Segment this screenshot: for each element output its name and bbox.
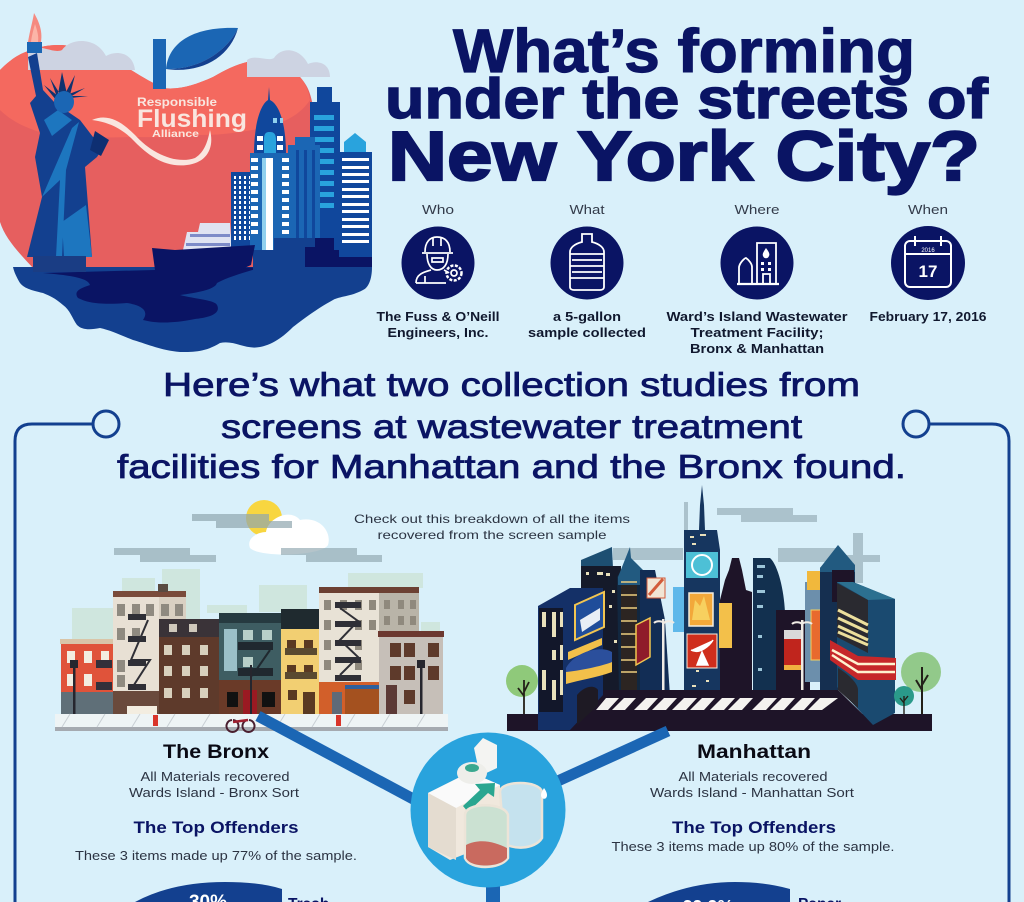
grey building <box>378 631 444 714</box>
Bronx note: These 3 items made up 77% of the sample. <box>75 849 357 863</box>
center dark tower <box>719 558 752 697</box>
tank building and toilet <box>428 738 500 860</box>
title <box>385 17 989 195</box>
when icon: calendar <box>891 226 965 300</box>
when column <box>870 203 986 324</box>
title: What’s forming <box>453 17 915 85</box>
clouds <box>28 41 330 77</box>
intro note: Check out this breakdown of all the items <box>354 512 630 526</box>
subheading: screens at wastewater treatment <box>221 408 802 445</box>
where label: Where <box>734 203 780 217</box>
Manhattan title: Manhattan <box>697 742 811 763</box>
Manhattan note: These 3 items made up 80% of the sample. <box>612 840 894 854</box>
right frame line with node <box>903 411 1009 902</box>
left block <box>538 588 612 730</box>
Manhattan subtitle: All Materials recovered <box>678 769 828 784</box>
left towers <box>581 547 685 697</box>
where text: Treatment Facility; <box>690 325 824 340</box>
where column <box>666 203 848 356</box>
when icon: calendar: 17 <box>919 262 937 281</box>
what text: sample collected <box>528 325 646 340</box>
Bronx illustration <box>55 500 448 732</box>
white tall building <box>113 584 186 714</box>
red building <box>60 639 114 714</box>
robe <box>27 53 108 257</box>
street base <box>507 690 932 731</box>
where icon: treatment facility <box>720 226 794 300</box>
brown building <box>159 619 219 714</box>
logo text: Flushing <box>137 105 247 133</box>
sky: sun and clouds <box>114 500 382 562</box>
when text: February 17, 2016 <box>870 309 986 324</box>
who text: Engineers, Inc. <box>388 325 488 340</box>
when label: When <box>908 203 948 217</box>
intro note: recovered from the screen sample <box>378 528 607 542</box>
what column <box>528 203 646 340</box>
who text <box>376 309 500 340</box>
crown <box>44 72 88 100</box>
apple <box>0 45 316 270</box>
treatment circle <box>410 732 566 888</box>
what text <box>528 309 646 340</box>
sky haze <box>613 502 880 583</box>
head <box>54 91 74 113</box>
street lamps <box>70 660 425 727</box>
what icon: water jug <box>550 226 624 300</box>
distant buildings <box>72 569 440 640</box>
ferry <box>152 223 255 270</box>
clarifier tanks <box>465 783 547 867</box>
Bronx heading <box>75 742 357 863</box>
logo text <box>92 97 247 165</box>
subheading: facilities for Manhattan and the Bronx found. <box>117 448 906 485</box>
Manhattan top offenders heading: The Top Offenders <box>672 819 836 837</box>
hero illustration: apple, statue and skyline <box>0 13 372 352</box>
Manhattan subtitle: Wards Island - Manhattan Sort <box>650 785 854 800</box>
sidewalk <box>55 714 448 731</box>
cream building <box>319 587 419 714</box>
Manhattan illustration <box>506 485 941 731</box>
pedestal <box>33 256 86 272</box>
logo text: Alliance <box>152 129 200 140</box>
who icon: engineer <box>402 226 474 300</box>
torch <box>27 13 42 53</box>
Bronx subtitle <box>129 769 299 800</box>
what label: What <box>570 203 605 217</box>
statue of liberty <box>27 13 109 272</box>
title: New York City? <box>388 117 980 195</box>
title: under the streets of <box>385 67 989 131</box>
where text <box>666 309 848 356</box>
teal building <box>219 613 281 714</box>
Manhattan chart start <box>648 882 841 902</box>
tall tower <box>684 485 720 697</box>
trees <box>506 652 941 714</box>
subheading: Here’s what two collection studies from <box>163 366 860 403</box>
Bronx title: The Bronx <box>163 742 269 763</box>
skyline <box>231 87 372 270</box>
Bronx subtitle: Wards Island - Bronx Sort <box>129 785 299 800</box>
water shadow <box>43 267 263 322</box>
who column <box>376 203 500 340</box>
logo text: Responsible <box>137 97 217 109</box>
pipes <box>258 716 668 902</box>
what text: a 5-gallon <box>553 309 621 324</box>
water <box>13 267 372 352</box>
right block <box>830 582 896 725</box>
where text: Ward’s Island Wastewater <box>666 309 848 324</box>
when icon: calendar: 2016 <box>921 248 935 254</box>
Bronx subtitle: All Materials recovered <box>140 769 290 784</box>
tablet <box>90 131 109 156</box>
Manhattan heading <box>612 742 894 854</box>
subheading <box>117 366 906 485</box>
hydrants and bicycle <box>153 715 341 732</box>
who text: The Fuss & O’Neill <box>376 309 500 324</box>
Bronx chart start <box>135 882 329 902</box>
right dark towers <box>753 545 855 698</box>
left frame line with node <box>15 411 119 902</box>
Manhattan subtitle <box>650 769 854 800</box>
crosswalk <box>596 698 838 710</box>
intro note <box>354 512 630 542</box>
apple stem and leaf <box>153 28 238 89</box>
Bronx top offenders heading: The Top Offenders <box>134 819 298 837</box>
yellow building <box>281 609 319 714</box>
robe highlights <box>42 110 92 257</box>
who label: Who <box>422 203 454 217</box>
where text: Bronx & Manhattan <box>690 341 824 356</box>
